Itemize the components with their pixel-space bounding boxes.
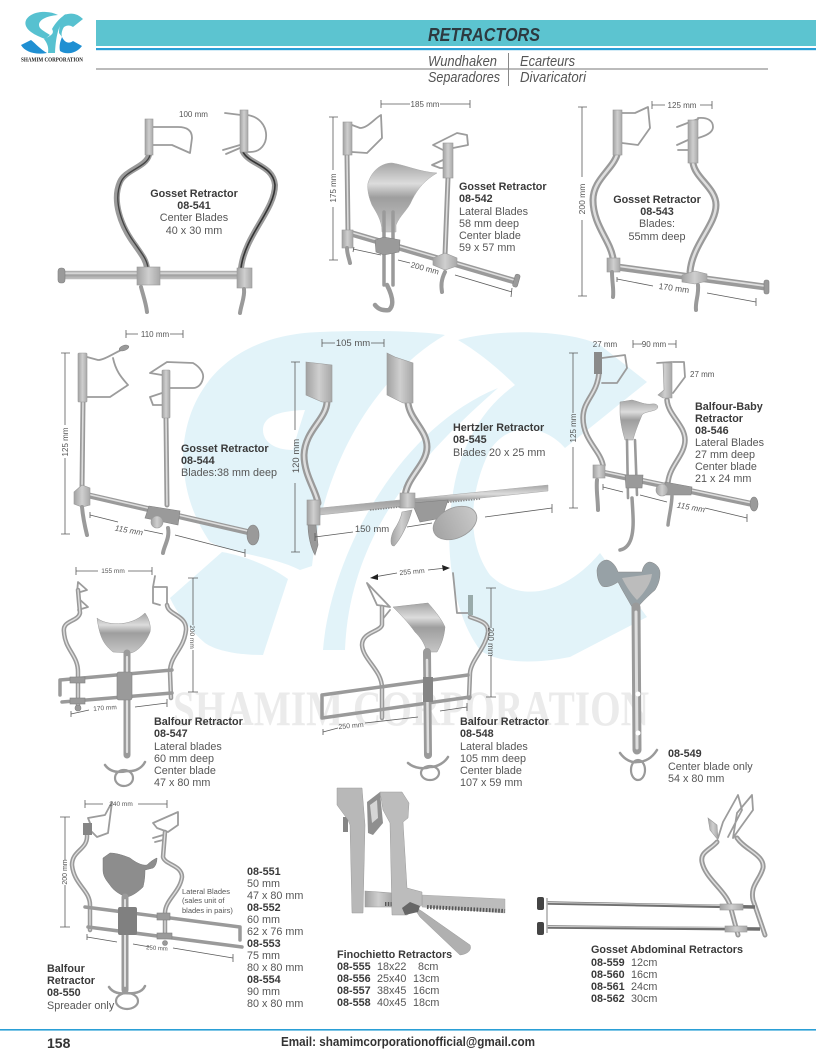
- item 08-547: [60, 567, 244, 789]
- instrument 08-541: [58, 110, 275, 313]
- instrument Gosset Abdominal: [537, 795, 765, 935]
- label 08-542: 59 x 57 mm: [459, 242, 515, 254]
- label Finochietto: 08-558: [337, 997, 371, 1009]
- lateral blades list: 08-551: [247, 866, 281, 878]
- dimensions 08-546: 27 mm: [593, 340, 618, 349]
- dimensions 08-542: [329, 100, 512, 297]
- label 08-542: 58 mm deep: [459, 218, 519, 230]
- dimensions 08-548: 255 mm: [399, 568, 425, 577]
- dimensions 08-544: [61, 330, 245, 557]
- instrument 08-548: [322, 573, 488, 780]
- label 08-545: Blades 20 x 25 mm: [453, 447, 545, 459]
- dimensions 08-543: 125 mm: [668, 101, 697, 110]
- translated titles: Separadores: [428, 69, 500, 86]
- label Gosset Abdominal: Gosset Abdominal Retractors: [591, 944, 743, 956]
- label 08-543: Gosset Retractor: [613, 194, 702, 206]
- item Gosset Abdominal: [537, 795, 765, 1005]
- item 08-546: [569, 340, 765, 550]
- label 08-545: 08-545: [453, 434, 487, 446]
- label Finochietto: Finochietto Retractors: [337, 949, 452, 961]
- translated titles: [428, 53, 587, 86]
- dimensions 08-545: [291, 338, 552, 552]
- lateral blades list: 08-553: [247, 938, 281, 950]
- instrument 08-547: [60, 576, 186, 786]
- label Gosset Abdominal: 12cm: [631, 957, 657, 969]
- dimensions 08-546: 27 mm: [690, 370, 715, 379]
- instrument Finochietto: [337, 788, 505, 955]
- label Gosset Abdominal: 08-560: [591, 969, 625, 981]
- item 08-545: [291, 338, 552, 555]
- instrument 08-546: [583, 352, 758, 550]
- label 08-546: Balfour-Baby: [695, 401, 763, 413]
- label 08-542: Lateral Blades: [459, 206, 529, 218]
- lateral blades list: 80 x 80 mm: [247, 962, 303, 974]
- dimensions 08-547: 200 mm: [188, 625, 195, 649]
- lateral blades list: 80 x 80 mm: [247, 998, 303, 1010]
- logo: SHAMIM CORPORATION: [21, 58, 84, 64]
- dimensions 08-543: 200 mm: [577, 184, 587, 214]
- translated titles: Divaricatori: [520, 69, 587, 86]
- dimensions 08-545: 150 mm: [355, 524, 389, 535]
- label 08-546: 21 x 24 mm: [695, 473, 751, 485]
- lateral blades list: 08-554: [247, 974, 281, 986]
- label 08-541: Center Blades: [160, 212, 229, 224]
- dimension 100 mm: 100 mm: [179, 110, 208, 119]
- dimensions 08-544: 110 mm: [141, 330, 169, 339]
- dimensions 08-544: 115 mm: [114, 524, 144, 537]
- lateral blades note: (sales unit of: [182, 896, 225, 905]
- label 08-548: Balfour Retractor: [460, 716, 550, 728]
- lateral blades list: 08-552: [247, 902, 281, 914]
- label Gosset Abdominal: 08-562: [591, 993, 625, 1005]
- item 08-548: [322, 565, 550, 789]
- dimensions 08-550: 200 mm: [62, 859, 69, 885]
- label 08-547: 47 x 80 mm: [154, 777, 210, 789]
- label Finochietto: 25x40: [377, 973, 406, 985]
- lateral blades list: 50 mm: [247, 878, 280, 890]
- label 08-548: 08-548: [460, 728, 494, 740]
- label 08-541: 40 x 30 mm: [166, 225, 222, 237]
- lateral blades list: 60 mm: [247, 914, 280, 926]
- label 08-549: 54 x 80 mm: [668, 773, 724, 785]
- dimensions 08-550: 250 mm: [146, 945, 168, 953]
- label Finochietto: 40x45: [377, 997, 406, 1009]
- label 08-541: Gosset Retractor: [150, 188, 239, 200]
- translated titles: Wundhaken: [428, 53, 497, 70]
- label Finochietto: 08-555: [337, 961, 371, 973]
- label 08-543: 08-543: [640, 206, 674, 218]
- title: RETRACTORS: [428, 25, 540, 45]
- label 08-546: 27 mm deep: [695, 449, 755, 461]
- title accent line: [96, 48, 816, 50]
- label 08-543: Blades:: [639, 218, 675, 230]
- item 08-542: [329, 100, 547, 310]
- footer: [0, 1029, 816, 1051]
- lateral blades list: 90 mm: [247, 986, 280, 998]
- label 08-546: 08-546: [695, 425, 729, 437]
- label Finochietto: 08-557: [337, 985, 371, 997]
- dimensions 08-545: 105 mm: [336, 338, 370, 349]
- header: [21, 12, 816, 86]
- dimensions 08-545: 120 mm: [291, 439, 302, 473]
- label 08-549: Center blade only: [668, 761, 753, 773]
- label 08-546: Retractor: [695, 413, 744, 425]
- dimensions 08-542: 200 mm: [410, 260, 440, 277]
- label 08-542: Center blade: [459, 230, 521, 242]
- label Gosset Abdominal: 24cm: [631, 981, 657, 993]
- label 08-547: Center blade: [154, 765, 216, 777]
- item 08-549: [597, 560, 753, 785]
- label Finochietto: 08-556: [337, 973, 371, 985]
- dimensions 08-546: 125 mm: [569, 413, 578, 442]
- dimensions 08-544: 125 mm: [61, 427, 70, 456]
- dimensions 08-550: 240 mm: [109, 801, 133, 808]
- label 08-549: 08-549: [668, 748, 702, 760]
- instrument 08-549: [597, 560, 660, 780]
- item 08-550: [47, 800, 303, 1012]
- label 08-545: Hertzler Retractor: [453, 422, 545, 434]
- label 08-543: 55mm deep: [628, 231, 686, 243]
- label 08-547: Balfour Retractor: [154, 716, 244, 728]
- dimensions 08-542: 185 mm: [411, 100, 440, 109]
- email: Email: shamimcorporationofficial@gmail.com: [281, 1035, 535, 1049]
- label 08-548: 105 mm deep: [460, 753, 526, 765]
- label 08-548: 107 x 59 mm: [460, 777, 522, 789]
- label 08-550: Retractor: [47, 975, 96, 987]
- dimensions 08-543: [577, 101, 756, 306]
- dimensions 08-547: [71, 567, 198, 717]
- instrument 08-542: [342, 115, 521, 310]
- label Finochietto: 18x22: [377, 961, 406, 973]
- item Finochietto: [337, 788, 505, 1009]
- label 08-544: Gosset Retractor: [181, 443, 269, 455]
- item 08-541: [58, 110, 275, 313]
- label 08-541: 08-541: [177, 200, 211, 212]
- watermark text: SHAMIM CORPORATION: [173, 680, 649, 736]
- label 08-546: Lateral Blades: [695, 437, 765, 449]
- instrument 08-544: [74, 344, 259, 553]
- label 08-550: 08-550: [47, 987, 81, 999]
- dimensions 08-550: [60, 800, 233, 962]
- label Finochietto: 13cm: [413, 973, 439, 985]
- label Gosset Abdominal: 16cm: [631, 969, 657, 981]
- label 08-542: Gosset Retractor: [459, 181, 547, 193]
- label 08-542: 08-542: [459, 193, 493, 205]
- label Finochietto: 18cm: [413, 997, 439, 1009]
- title bar: [96, 20, 816, 46]
- logo: [21, 12, 84, 64]
- dimensions 08-546: 90 mm: [642, 340, 667, 349]
- label Finochietto: 8cm: [418, 961, 438, 973]
- watermark logo: [170, 331, 647, 661]
- label Gosset Abdominal: 30cm: [631, 993, 657, 1005]
- item 08-544: [61, 330, 277, 557]
- label 08-544: Blades:38 mm deep: [181, 467, 277, 479]
- dimensions 08-547: 155 mm: [101, 568, 125, 575]
- page number: 158: [47, 1035, 71, 1051]
- label 08-546: Center blade: [695, 461, 757, 473]
- lateral blades list: 62 x 76 mm: [247, 926, 303, 938]
- label 08-548: Lateral blades: [460, 741, 528, 753]
- dimensions 08-548: [323, 565, 496, 735]
- dimensions 08-548: 250 mm: [338, 722, 364, 731]
- dimensions 08-543: 170 mm: [658, 281, 690, 295]
- lateral blades list: 75 mm: [247, 950, 280, 962]
- label 08-544: 08-544: [181, 455, 215, 467]
- lateral blades list: 47 x 80 mm: [247, 890, 303, 902]
- lateral blades note: blades in pairs): [182, 906, 233, 915]
- label 08-550: Balfour: [47, 963, 86, 975]
- dimensions 08-548: 200 mm: [486, 628, 495, 657]
- label 08-548: Center blade: [460, 765, 522, 777]
- item 08-543: [577, 101, 769, 310]
- instrument 08-550: [72, 802, 242, 1009]
- instrument 08-545: [304, 353, 548, 555]
- label Finochietto: 16cm: [413, 985, 439, 997]
- label Finochietto: 38x45: [377, 985, 406, 997]
- label Gosset Abdominal: 08-561: [591, 981, 625, 993]
- label 08-547: 08-547: [154, 728, 188, 740]
- lateral blades note: Lateral Blades: [182, 887, 230, 896]
- dimensions 08-546: 115 mm: [676, 501, 706, 514]
- dimensions 08-547: 170 mm: [93, 704, 117, 713]
- translated titles: Ecarteurs: [520, 53, 575, 70]
- label 08-550: Spreader only: [47, 1000, 115, 1012]
- label 08-547: Lateral blades: [154, 741, 222, 753]
- label 08-547: 60 mm deep: [154, 753, 214, 765]
- dimensions 08-542: 175 mm: [329, 173, 338, 202]
- instrument 08-543: [593, 107, 769, 310]
- dimensions 08-546: [569, 340, 747, 522]
- label Gosset Abdominal: 08-559: [591, 957, 625, 969]
